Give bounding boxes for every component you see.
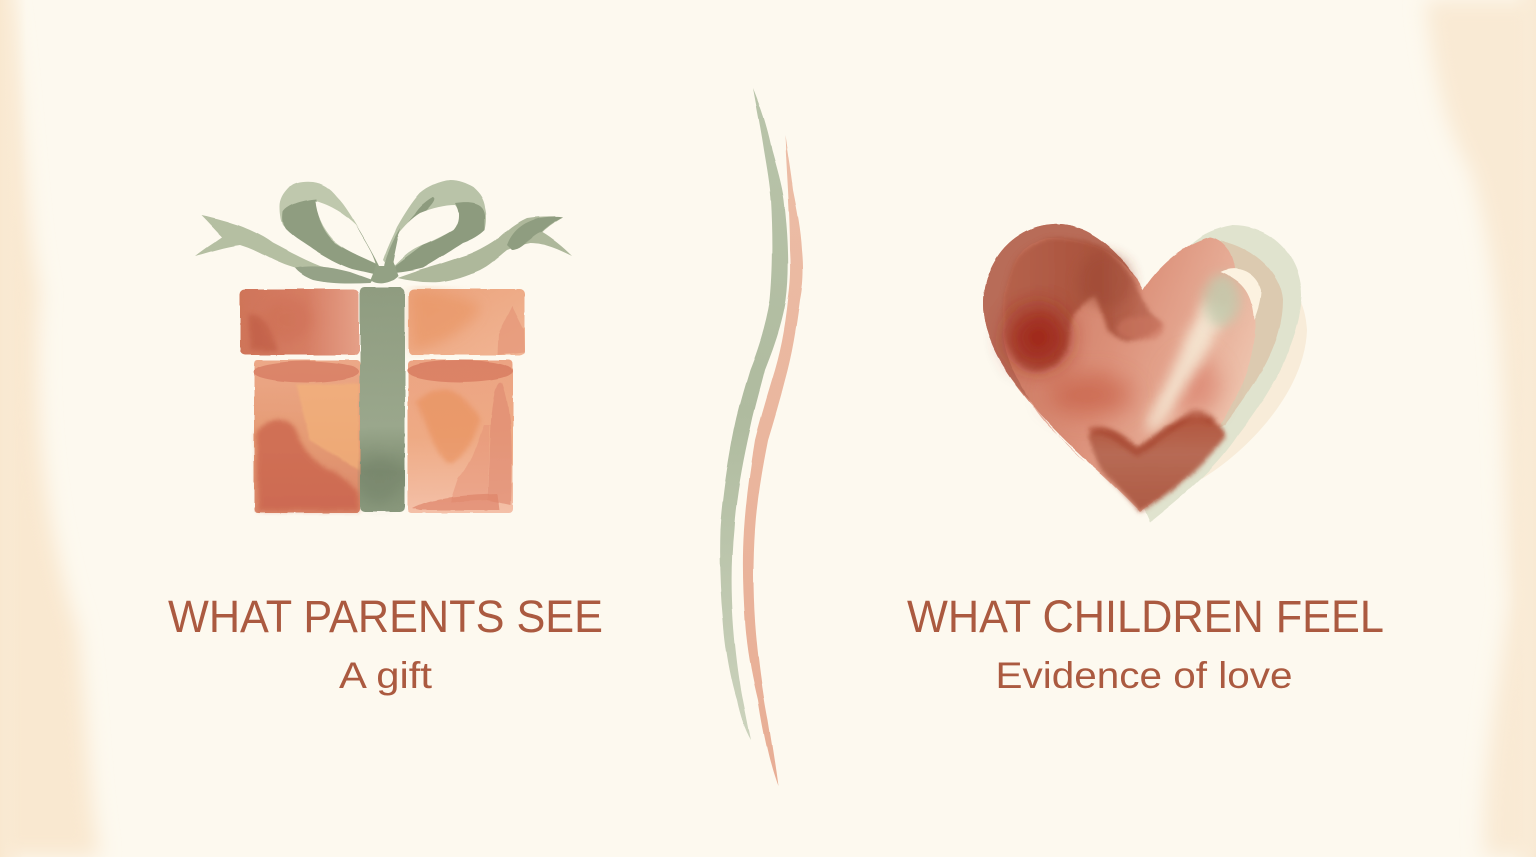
bow centre [356, 225, 400, 283]
gift icon [195, 180, 572, 513]
sage bloom [1204, 274, 1240, 326]
right caption [907, 591, 1384, 696]
right loop dark band [393, 202, 485, 273]
ribbon [360, 287, 405, 512]
sage outer layer [1140, 225, 1302, 522]
left caption [168, 591, 603, 696]
left loop light [280, 182, 377, 275]
lower dark wash [1088, 415, 1225, 512]
divider: watercolor strokes [720, 88, 803, 786]
lid left [240, 289, 359, 355]
brown top lobe shade [1077, 252, 1133, 308]
right tail dark fold [507, 216, 563, 250]
subheading: evidence of love: Evidence of love [996, 655, 1292, 696]
lid right [409, 289, 525, 355]
dark wash upper left [1003, 238, 1163, 371]
left tail [195, 215, 352, 275]
heart icon [983, 224, 1307, 522]
main heart body [983, 224, 1261, 512]
heading: what children feel: WHAT CHILDREN FEEL [907, 591, 1384, 642]
body left [253, 360, 360, 513]
red mid band [1048, 375, 1132, 415]
cream shadow layer [1180, 280, 1307, 490]
heading: what parents see: WHAT PARENTS SEE [168, 591, 603, 642]
deep red bloom [1008, 308, 1068, 368]
body right [407, 360, 513, 513]
subheading: a gift: A gift [339, 655, 433, 696]
tan inner layer [1180, 240, 1283, 440]
right tail [397, 216, 572, 282]
pink right side [1171, 357, 1219, 413]
sage stroke [720, 88, 788, 740]
left outer rim [983, 224, 1140, 400]
lower dark edge band [1090, 413, 1213, 452]
left lower leaf [295, 266, 372, 284]
pale lower left [1027, 397, 1085, 462]
pale fade on dark wash [1116, 316, 1164, 340]
salmon stroke [743, 135, 803, 786]
white highlight [1220, 269, 1261, 320]
bow [195, 180, 572, 284]
right loop hole [385, 205, 459, 265]
right loop light [383, 180, 486, 273]
left loop hole [315, 201, 377, 264]
left loop dark band [283, 199, 378, 275]
pale highlight streak [1145, 300, 1228, 430]
